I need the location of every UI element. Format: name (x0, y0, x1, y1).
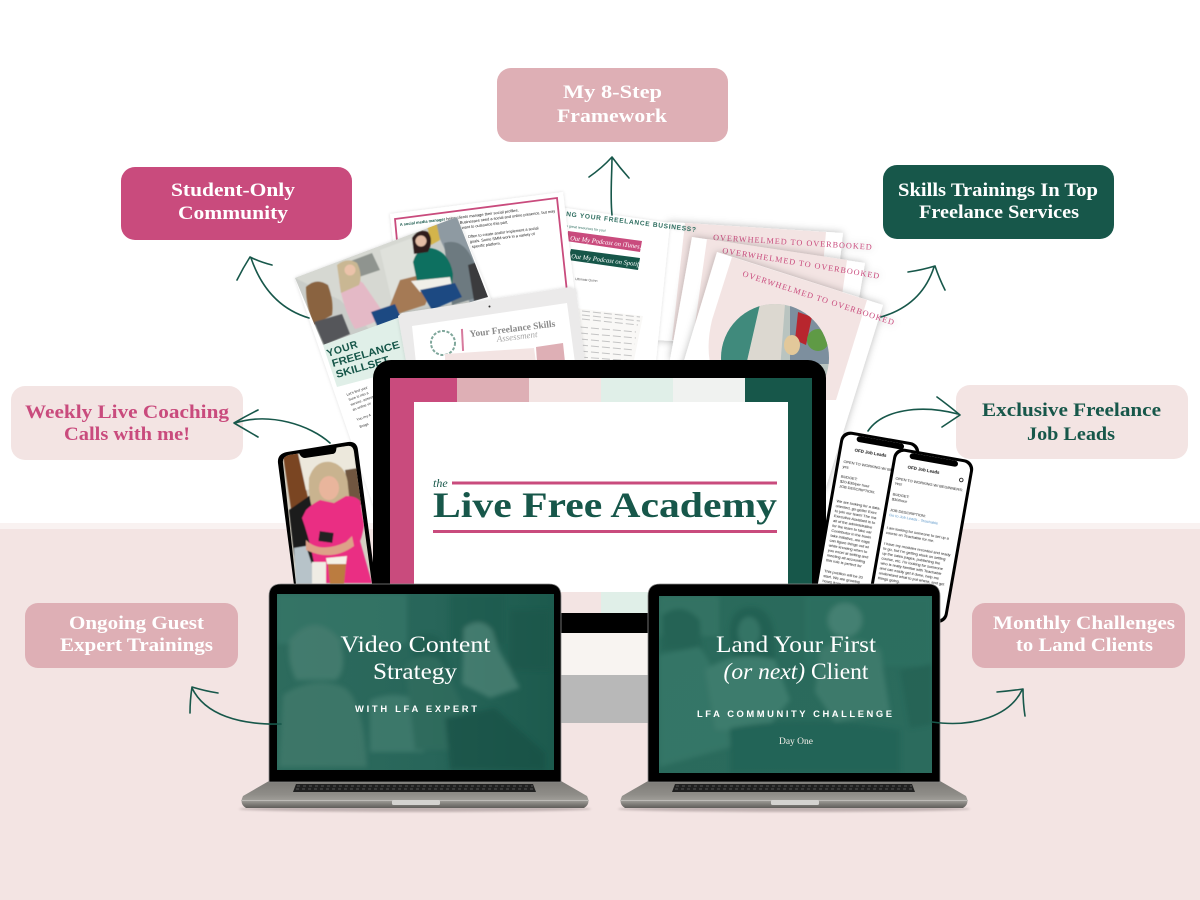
button: ongoing guest expert trainings: Ongoing Guest (69, 613, 205, 634)
phone: OFD job leads, rear: Executive Assistant is to (834, 513, 876, 525)
worksheet: your freelance skillset with photo: Let's find your (346, 385, 369, 397)
worksheet photo (295, 217, 488, 345)
phone: OFD job leads, rear: This position will be 20 (824, 568, 864, 580)
button: monthly challenges (972, 603, 1185, 668)
phone: OFD job leads, front: OFD Job Leads (907, 465, 940, 475)
arrow: to skills trainings (881, 266, 945, 317)
document: are you growing your freelance business: Ultimate Quinn (575, 277, 598, 283)
button: exclusive freelance job leads: Job Leads (1027, 424, 1115, 445)
document: social media manager page: goals. Some SMM work in a variety of (470, 231, 536, 244)
phone: OFD job leads, rear: OFD Job Leads (854, 448, 887, 458)
arrow: to monthly challenges (932, 689, 1025, 723)
phone: OFD job leads, rear: all of the administrative (833, 518, 873, 530)
logo: the Live Free Academy: the (433, 476, 448, 490)
button: skills trainings (883, 165, 1114, 239)
phone: OFD job leads, rear: this role is perfect for (826, 557, 863, 569)
tablet: your freelance skills assessment (398, 287, 592, 440)
document: social media manager page (390, 192, 575, 320)
document: overwhelmed to overbooked, back page: OVERWHELMED TO OVERBOOKED (713, 233, 873, 252)
worksheet heading: FREELANCE (331, 339, 401, 370)
phone: OFD job leads, front: JOB DESCRIPTION: (890, 507, 926, 518)
worksheet: your freelance skillset with photo: Sure is into a (348, 391, 369, 402)
monitor (373, 360, 826, 723)
phone: OFD job leads, rear (812, 430, 921, 613)
button: my 8-step framework: Framework (557, 106, 667, 127)
logo: the Live Free Academy (433, 476, 777, 533)
laptop screen: land your first client: Land Your First (716, 632, 876, 658)
phone: OFD job leads, rear: We are looking for a data- (836, 498, 882, 511)
document: overwhelmed to overbooked, front page with street photo: OVERWHELMED TO OVERBOOKED (741, 269, 896, 327)
worksheet: your freelance skillset with photo: service. assess (350, 395, 375, 407)
street photo (721, 304, 829, 376)
document: social media manager page: want to outsource this part. (462, 219, 508, 230)
phone: OFD job leads, front: I have my modules recorded and ready (884, 541, 951, 557)
button: student-only community: Student-Only (171, 180, 296, 201)
phone: OFD job leads, front: BUDGET: (892, 491, 910, 499)
button: skills trainings: Skills Trainings In Top (898, 180, 1098, 201)
document: are you growing your freelance business: Out My Podcast on iTunes. (570, 235, 642, 251)
laptop screen: video content strategy (277, 594, 554, 770)
phone: OFD job leads, rear: OPEN TO WORKING W/ BEGI (843, 459, 897, 473)
document: social media manager page: specific platform. (472, 240, 501, 249)
worksheet heading: SKILLSET (335, 354, 391, 381)
laptop screen: land your first client: (or next) Client (724, 659, 869, 685)
phone: OFD job leads, front: Go to Job Leads - Teachable (889, 512, 939, 526)
button: monthly challenges: Monthly Challenges (993, 613, 1175, 634)
laptop screen: land your first client: LFA COMMUNITY CHALLENGE (697, 708, 892, 719)
arrow: to ongoing guest trainings (190, 687, 281, 724)
phone: OFD job leads, rear: hours from onboarding (822, 578, 862, 590)
button: ongoing guest expert trainings (25, 603, 238, 668)
button: student-only community (121, 167, 352, 240)
laptop: land your first client (618, 584, 970, 812)
button: student-only community: Community (178, 203, 289, 224)
laptop screen: video content strategy: Strategy (373, 659, 457, 685)
phone: OFD job leads, front: things going. (878, 575, 900, 584)
button: skills trainings: Freelance Services (919, 202, 1079, 223)
worksheet: your freelance skillset with photo: You my A (356, 413, 372, 422)
phone: OFD job leads, rear: you excel at setting and (828, 547, 869, 559)
button: my 8-step framework (497, 68, 728, 142)
arrow: to weekly coaching calls (234, 410, 330, 443)
tablet: your freelance skills assessment: Assessment (495, 329, 538, 344)
laptop: video content strategy (239, 584, 591, 812)
worksheet: your freelance skillset with photo (294, 216, 492, 507)
button: my 8-step framework: My 8-Step (563, 82, 662, 103)
worksheet: your freelance skillset with photo: Brags (359, 422, 369, 429)
arrow: to my 8-step framework (589, 157, 629, 215)
laptop screen: video content strategy: WITH LFA EXPERT (355, 703, 477, 714)
phone: OFD job leads, rear: take initiative, are eage (830, 533, 870, 545)
phone: OFD job leads, front (866, 447, 975, 625)
document: social media manager page: A social media manager helps clients manage their social profiles. (400, 207, 519, 227)
document: overwhelmed to overbooked, back page (655, 222, 873, 350)
document: overwhelmed to overbooked, front page with street photo (660, 252, 896, 490)
worksheet: your freelance skillset with photo: an online vir (352, 401, 372, 412)
button: exclusive freelance job leads (956, 385, 1188, 459)
button: weekly live coaching calls (11, 386, 243, 460)
phone: OFD job leads, front: course, etc. I'm looking for someone (881, 555, 943, 571)
document: are you growing your freelance business: Out My Podcast on Spotify. (571, 253, 644, 269)
phone: OFD job leads, front: $30/hour (892, 496, 908, 504)
logo: the Live Free Academy: Live Free Academy (433, 485, 777, 525)
document: are you growing your freelance business: NG YOUR FREELANCE BUSINESS? (566, 211, 697, 234)
laptop screen: land your first client: Day One (779, 737, 813, 747)
phone: OFD job leads, front: up the sales pages, publishing the (882, 550, 941, 566)
phone: OFD job leads, rear: $20-$30/per hour (840, 478, 871, 489)
phone: OFD job leads, rear: for the right person. (821, 583, 855, 594)
phone: OFD job leads, rear: BUDGET: (841, 474, 858, 481)
phone: OFD job leads, rear: JOB DESCRIPTION: (839, 483, 875, 495)
phone: OFD job leads, front: and can easily get it done, help me (879, 565, 939, 581)
phone: left with woman in pink photo (278, 442, 373, 584)
arrow: to exclusive job leads (868, 397, 960, 431)
phone: OFD job leads, rear: Contributor in the busin (831, 528, 871, 540)
button: weekly live coaching calls: Weekly Live Coaching (25, 402, 230, 423)
monitor bezel (373, 360, 826, 633)
tablet logo ring (431, 331, 455, 355)
arrow: to student-only community (237, 257, 309, 318)
document: are you growing your freelance business: e great resources for you! (566, 224, 606, 233)
phone: OFD job leads, rear: oriented, go-getter Exec (835, 503, 877, 515)
phone: OFD job leads, rear: can figure things out wi (829, 538, 869, 549)
document: are you growing your freelance business (530, 205, 697, 400)
phone: OFD job leads, front: Yes! (894, 481, 903, 487)
phone: OFD job leads, rear: meeting all accounting (827, 552, 866, 564)
phone: OFD job leads, front: to go, but I'm getting stuck on setting (883, 546, 946, 561)
monitor colour band (390, 378, 812, 613)
phone: OFD job leads, rear: yes (842, 464, 849, 470)
laptop screen: land your first client (659, 596, 932, 773)
button: monthly challenges: to Land Clients (1016, 635, 1153, 656)
phone: OFD job leads, front: OPEN TO WORKING W/ BEGINNERS: (895, 476, 963, 492)
phone: OFD job leads, rear: for the team to take car (832, 523, 873, 535)
monitor stand (500, 633, 700, 675)
phone: OFD job leads, front: understand what to put where, and get (879, 570, 946, 587)
phone: OFD job leads, front: who is really familiar with Teachable (880, 560, 942, 576)
laptop screen: video content strategy: Video Content (340, 632, 491, 658)
document: overwhelmed to overbooked, middle page (670, 237, 881, 380)
worksheet heading: YOUR (325, 338, 360, 360)
document: social media manager page: Businesses need a social and online presence, but may (460, 208, 555, 225)
phone: OFD job leads, front: course on Teachable for me. (886, 530, 935, 543)
tablet: your freelance skills assessment: Your Freelance Skills (469, 320, 556, 340)
button: exclusive freelance job leads: Exclusive Freelance (982, 400, 1161, 421)
document: social media manager page: Often to create and/or implement a social (468, 225, 539, 239)
phone: OFD job leads, rear: to join our team! The ma (834, 508, 878, 520)
button: ongoing guest expert trainings: Expert Trainings (60, 635, 213, 656)
phone: OFD job leads, front: I am looking for someone to set up a (886, 525, 950, 541)
phone: OFD job leads, rear: while knowing when to (828, 542, 868, 554)
button: weekly live coaching calls: Calls with me! (64, 424, 190, 445)
worksheet heading (325, 338, 401, 381)
phone: OFD job leads, rear: start. We are growing (823, 573, 860, 584)
document: overwhelmed to overbooked, middle page: OVERWHELMED TO OVERBOOKED (722, 246, 881, 281)
